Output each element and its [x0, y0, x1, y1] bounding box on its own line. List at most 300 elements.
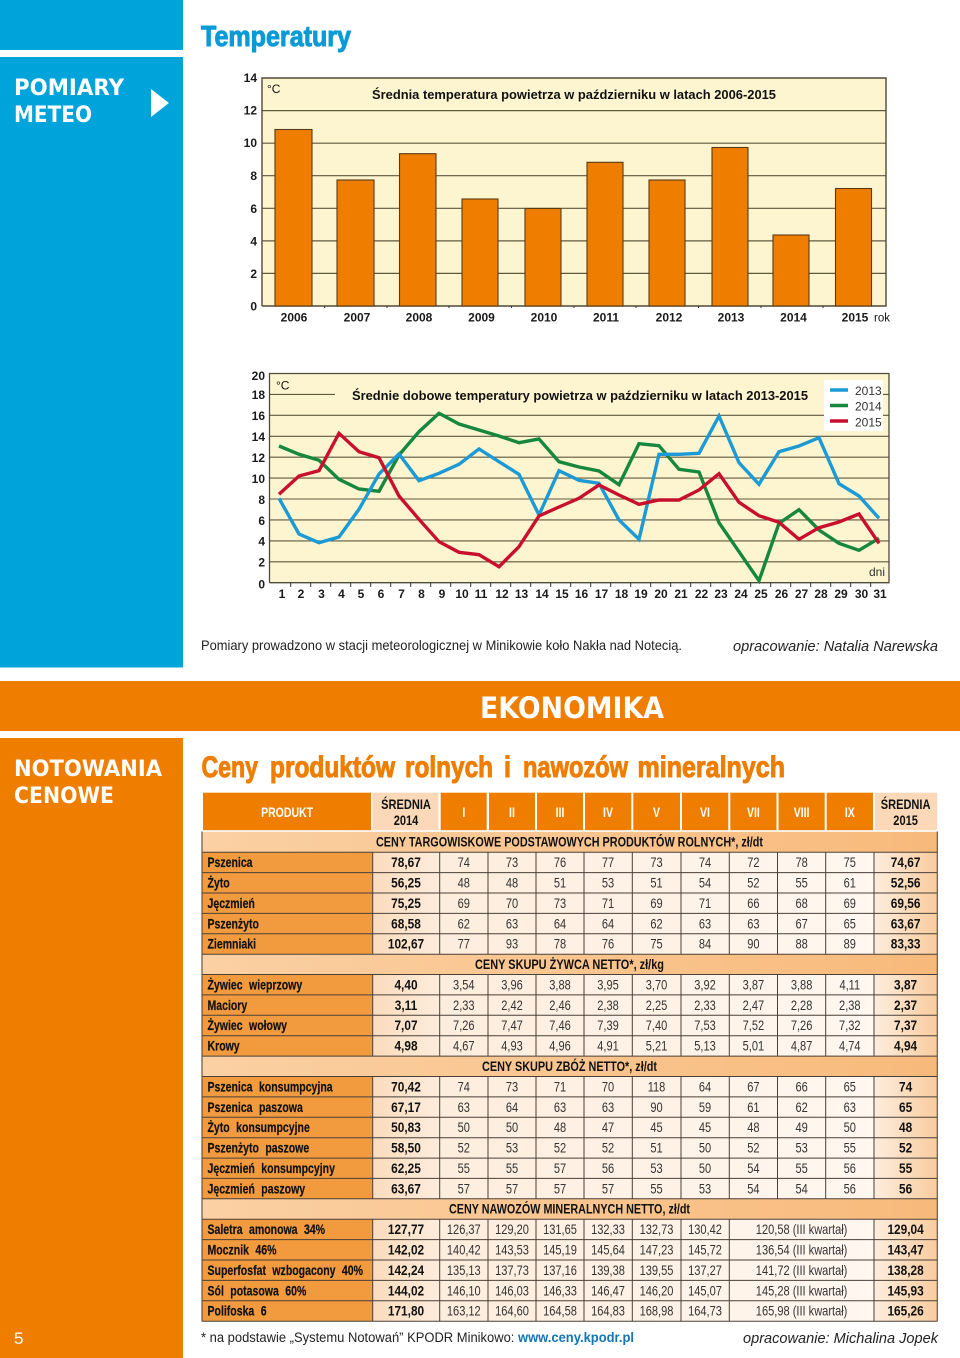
- x axis labels: 2009: [468, 310, 495, 324]
- heading: Ceny produktów: nawozów: [523, 751, 629, 784]
- banner: EKONOMIKA: EKONOMIKA: [480, 691, 665, 725]
- row: Żywiec wieprzowy: 3,87: [894, 977, 917, 993]
- heading: Ceny produktów: i: [504, 751, 511, 784]
- series: 2013 blue line: [279, 416, 879, 543]
- heading: Ceny produktów: rolnych: [405, 751, 493, 784]
- table header row: V: [653, 805, 660, 820]
- row: Żywiec wieprzowy: 3,88: [791, 977, 812, 993]
- table header row: II: [509, 805, 515, 820]
- row: Żywiec wołowy: 7,37: [894, 1017, 917, 1033]
- row: Żywiec wieprzowy: 3,92: [694, 977, 716, 993]
- row: Sól potasowa: [208, 1283, 924, 1299]
- table header row: VII: [747, 805, 760, 820]
- row: Pszenżyto paszowe: 52: [554, 1141, 566, 1156]
- row: Pszenica konsumpcyjna: 71: [554, 1079, 566, 1095]
- row: Polifoska 6: 164,73: [688, 1304, 722, 1319]
- row: Pszenżyto: 62: [650, 916, 663, 932]
- row: Pszenżyto paszowe: 52: [747, 1141, 760, 1156]
- row: Maciory: 2,38: [839, 998, 861, 1013]
- row: Pszenica paszowa: Pszenica paszowa: [208, 1100, 303, 1115]
- y axis labels: 0: [258, 578, 265, 592]
- row: Pszenica konsumpcyjna: 74: [458, 1079, 470, 1095]
- row: Pszenżyto: 63,67: [891, 916, 920, 931]
- table header row: VIII: [794, 805, 809, 820]
- y axis labels: 8: [258, 493, 265, 507]
- row: Żyto konsumpcyjne: 47: [602, 1120, 614, 1135]
- x axis labels: 2010: [531, 310, 558, 324]
- heading: Ceny produktów: Ceny: [202, 751, 258, 784]
- x axis labels: days: 2: [298, 587, 305, 601]
- row: Żywiec wołowy: 7,39: [597, 1018, 619, 1033]
- row: Pszenica paszowa: 63: [554, 1100, 566, 1115]
- table header row: 2014: [394, 813, 418, 828]
- row: Pszenica paszowa: 59: [699, 1100, 711, 1115]
- row: Pszenica konsumpcyjna: 64: [699, 1079, 711, 1095]
- page number: 5: [14, 1329, 23, 1348]
- row: Żywiec wołowy: 7,26: [453, 1018, 475, 1033]
- row: Maciory: 2,28: [791, 998, 812, 1013]
- row: Jęczmień: 69: [458, 896, 470, 911]
- row: Jęczmień: [208, 895, 920, 911]
- row: Sól potasowa: 145,28 (III kwartał): [756, 1283, 847, 1299]
- legend box: [824, 380, 883, 431]
- sidebar title: [14, 757, 162, 809]
- text: author credit Michalina Jopek: opracowanie: Michalina Jopek: [743, 1330, 939, 1347]
- row: Pszenżyto paszowe: Pszenżyto paszowe: [208, 1140, 309, 1156]
- row: Saletra amonowa: 132,33: [591, 1222, 625, 1237]
- x axis labels: days: 6: [378, 587, 385, 601]
- panel: top blue tab: [0, 0, 183, 50]
- x axis labels: 2015: [842, 310, 869, 324]
- table header row: ŚREDNIA: [381, 796, 431, 812]
- line chart: daily average temperature October 2013-2015: [252, 369, 889, 601]
- row: Pszenica: 73: [650, 855, 663, 870]
- row: Żyto konsumpcyjne: 48: [554, 1120, 566, 1135]
- row: Pszenżyto paszowe: 58,50: [391, 1140, 421, 1156]
- row: Jęczmień paszowy: 54: [795, 1181, 808, 1197]
- table: prices of agricultural products: [202, 793, 937, 1322]
- row: Polifoska 6: [208, 1303, 924, 1319]
- row: Maciory: 2,46: [549, 998, 571, 1013]
- row: Sól potasowa: 146,33: [543, 1283, 577, 1299]
- bar chart: average October temperature 2006-2015: [244, 71, 890, 324]
- x axis labels: 2006: [281, 310, 308, 324]
- x axis labels: days: 3: [318, 587, 325, 601]
- row: Żywiec wieprzowy: 4,11: [839, 977, 860, 993]
- row: Pszenica: 73: [506, 855, 518, 870]
- row: Krowy: 5,21: [646, 1039, 667, 1054]
- y axis labels: 20: [252, 369, 265, 383]
- row: Żyto: 53: [602, 875, 614, 891]
- row: Saletra amonowa: 127,77: [388, 1221, 424, 1237]
- row: Żyto konsumpcyjne: 48: [899, 1119, 912, 1135]
- row: Pszenżyto paszowe: 52: [458, 1141, 470, 1156]
- row: Maciory: 2,47: [743, 998, 764, 1013]
- row: Krowy: 4,94: [894, 1038, 917, 1054]
- row: Pszenica konsumpcyjna: Pszenica konsumpcyjna: [208, 1079, 333, 1095]
- table header row: PRODUKT: [261, 805, 314, 820]
- y axis labels: 14: [252, 430, 265, 444]
- sidebar title: NOTOWANIA: [14, 757, 162, 782]
- row: Krowy: 4,67: [453, 1039, 475, 1054]
- row: Polifoska 6: 164,83: [591, 1304, 625, 1319]
- x axis labels: days: 27: [795, 587, 808, 601]
- heading: Ceny produktów: [202, 751, 785, 784]
- row: Żywiec wołowy: 7,46: [549, 1018, 571, 1033]
- row: Pszenica konsumpcyjna: 73: [506, 1079, 518, 1095]
- row: Jęczmień konsumpcyjny: 55: [506, 1161, 518, 1176]
- row: Żyto konsumpcyjne: 48: [747, 1120, 760, 1135]
- row: Pszenica konsumpcyjna: 67: [747, 1079, 760, 1095]
- row: Jęczmień: 73: [554, 896, 566, 911]
- row: Mocznik: 145,64: [591, 1242, 625, 1258]
- row: Sól potasowa: 145,07: [688, 1283, 722, 1299]
- row: Saletra amonowa: 120,58 (III kwartał): [756, 1222, 847, 1237]
- row: Jęczmień konsumpcyjny: 56: [844, 1161, 856, 1176]
- unit labels: °C: [276, 378, 290, 392]
- x axis labels: rok: [874, 312, 890, 324]
- row: Pszenica konsumpcyjna: 118: [648, 1079, 665, 1095]
- row: Żyto: 61: [844, 875, 856, 891]
- legend box: 2013: [855, 384, 882, 398]
- row: Pszenżyto paszowe: [208, 1140, 912, 1156]
- y axis labels: 10: [252, 472, 265, 486]
- row: Żyto konsumpcyjne: 45: [699, 1120, 711, 1135]
- row: Pszenica paszowa: 67,17: [391, 1099, 421, 1115]
- row: Ziemniaki: 89: [844, 937, 856, 952]
- row: Pszenica konsumpcyjna: 70: [602, 1079, 614, 1095]
- row: Jęczmień: Jęczmień: [208, 896, 255, 911]
- row: Żywiec wieprzowy: 3,95: [597, 977, 619, 993]
- banner: EKONOMIKA: [0, 681, 960, 731]
- row: Pszenica paszowa: 62: [795, 1100, 808, 1115]
- row: Saletra amonowa: Saletra amonowa 34%: [208, 1222, 325, 1237]
- row: Mocznik: 136,54 (III kwartał): [756, 1242, 847, 1258]
- row: Saletra amonowa: 130,42: [688, 1222, 722, 1237]
- x axis labels: days: 7: [398, 587, 405, 601]
- row: Żywiec wołowy: 7,32: [839, 1018, 861, 1033]
- section: fertiliser prices: CENY NAWOZÓW MINERALNYCH NETTO, zł/dt: [449, 1202, 690, 1217]
- x axis labels: days: 22: [695, 587, 708, 601]
- row: Polifoska 6: 165,98 (III kwartał): [756, 1304, 847, 1319]
- x axis labels: 2014: [780, 310, 807, 324]
- row: Jęczmień paszowy: Jęczmień paszowy: [208, 1181, 305, 1197]
- row: Pszenica paszowa: [208, 1099, 912, 1115]
- row: Pszenica paszowa: 90: [650, 1100, 663, 1115]
- heading: Ceny produktów: mineralnych: [638, 751, 785, 784]
- row: Mocznik: 143,47: [887, 1242, 924, 1258]
- row: Żywiec wołowy: 7,47: [501, 1018, 523, 1033]
- row: Polifoska 6: 168,98: [640, 1304, 674, 1319]
- panel: NOTOWANIA CENOWE sidebar: [0, 738, 183, 1358]
- y axis labels: [252, 369, 265, 592]
- row: Sól potasowa: 146,10: [447, 1283, 481, 1299]
- row: Żyto: 52: [747, 875, 760, 891]
- row: Mocznik: 142,02: [388, 1242, 424, 1258]
- row: Pszenżyto: 65: [844, 916, 856, 932]
- row: Krowy: 4,96: [549, 1039, 571, 1054]
- row: Jęczmień paszowy: 57: [458, 1181, 470, 1197]
- row: Polifoska 6: 171,80: [388, 1303, 424, 1319]
- text: author credit Natalia Narewska: opracowanie: Natalia Narewska: [733, 638, 938, 655]
- row: Pszenżyto paszowe: 52: [899, 1140, 912, 1156]
- series: 2015 red line: [279, 433, 879, 567]
- row: Mocznik: Mocznik 46%: [208, 1242, 277, 1258]
- row: Jęczmień konsumpcyjny: 54: [747, 1161, 760, 1176]
- row: Sól potasowa: 145,93: [887, 1283, 924, 1298]
- x axis labels: days: 9: [439, 587, 446, 601]
- row: Mocznik: 143,53: [495, 1242, 529, 1258]
- row: Żywiec wieprzowy: 4,40: [394, 977, 418, 993]
- y axis labels: 12: [252, 451, 265, 465]
- row: Sól potasowa: 146,20: [640, 1283, 674, 1299]
- row: Żyto: 54: [699, 875, 711, 891]
- table header row: ŚREDNIA: [881, 796, 931, 812]
- row: Ziemniaki: 83,33: [891, 936, 920, 952]
- row: Pszenica konsumpcyjna: 65: [844, 1079, 856, 1095]
- table header row: III: [556, 805, 564, 820]
- icon: white arrow: [151, 89, 169, 117]
- row: Jęczmień paszowy: 57: [506, 1181, 518, 1197]
- x axis labels: days: 19: [634, 587, 648, 601]
- x axis labels: days: 24: [734, 587, 748, 601]
- row: Pszenżyto: 64: [554, 916, 566, 932]
- row: Ziemniaki: 76: [602, 937, 614, 952]
- series: 2014 green line: [279, 413, 879, 581]
- y axis labels: 6: [258, 514, 265, 528]
- row: Jęczmień: 68: [795, 896, 808, 911]
- sidebar title: POMIARY METEO: [14, 76, 125, 128]
- row: Sól potasowa: 146,47: [591, 1283, 625, 1299]
- x axis labels: 2008: [406, 310, 433, 324]
- y axis labels: 8: [250, 169, 257, 183]
- row: Saletra amonowa: [208, 1221, 924, 1237]
- row: Pszenica: Pszenica: [208, 855, 253, 870]
- row: Jęczmień paszowy: 57: [554, 1181, 566, 1197]
- row: Pszenica paszowa: 63: [458, 1100, 470, 1115]
- row: Pszenica paszowa: 64: [506, 1100, 518, 1115]
- row: Pszenica: 77: [602, 855, 614, 870]
- row: Superfosfat: 142,24: [388, 1262, 424, 1278]
- row: Krowy: 5,01: [743, 1039, 764, 1054]
- row: Żyto: 51: [554, 875, 566, 891]
- row: Jęczmień: 71: [699, 896, 711, 911]
- row: Jęczmień paszowy: 54: [747, 1181, 760, 1197]
- row: Pszenica: 74,67: [891, 854, 920, 870]
- x axis labels: 2012: [656, 310, 683, 324]
- row: Żyto: 55: [795, 875, 808, 891]
- table header row: IX: [845, 805, 855, 820]
- row: Pszenica: 78: [795, 855, 808, 870]
- x axis labels: days: 17: [595, 587, 608, 601]
- row: Żywiec wołowy: 7,40: [646, 1018, 667, 1033]
- row: Żywiec wieprzowy: Żywiec wieprzowy: [208, 976, 302, 993]
- row: Żywiec wieprzowy: 3,70: [646, 977, 667, 993]
- row: Żyto: 51: [650, 875, 663, 891]
- row: Pszenżyto paszowe: 50: [699, 1141, 711, 1156]
- row: Ziemniaki: 102,67: [388, 936, 424, 952]
- row: Sól potasowa: Sól potasowa 60%: [208, 1283, 307, 1299]
- row: Żywiec wołowy: 7,53: [694, 1018, 716, 1033]
- row: Jęczmień: 69: [844, 896, 856, 911]
- row: Pszenica: 74: [699, 855, 711, 870]
- row: Pszenżyto paszowe: 52: [602, 1141, 614, 1156]
- row: Krowy: 4,87: [791, 1039, 812, 1054]
- row: Ziemniaki: 78: [554, 937, 566, 952]
- row: Ziemniaki: [208, 936, 920, 952]
- row: Żyto konsumpcyjne: 50: [844, 1120, 856, 1135]
- row: Maciory: 2,42: [501, 998, 523, 1013]
- x axis labels: days: 12: [495, 587, 509, 601]
- row: Maciory: [208, 997, 917, 1013]
- row: Żyto konsumpcyjne: 49: [795, 1120, 808, 1135]
- x axis labels: days: 23: [714, 587, 728, 601]
- row: Pszenżyto paszowe: 51: [650, 1141, 663, 1156]
- y axis labels: 18: [252, 388, 265, 402]
- row: Superfosfat: 137,73: [495, 1263, 529, 1278]
- row: Mocznik: [208, 1242, 924, 1258]
- legend box: 2015: [855, 416, 882, 430]
- y axis labels: 0: [250, 300, 257, 314]
- row: Pszenica paszowa: 65: [899, 1099, 912, 1115]
- row: Żywiec wieprzowy: 3,88: [549, 977, 571, 993]
- row: Jęczmień konsumpcyjny: 55: [795, 1161, 808, 1176]
- y axis labels: [244, 71, 257, 314]
- sidebar title: CENOWE: [14, 784, 114, 809]
- table header row: IV: [603, 805, 613, 820]
- row: Pszenżyto: 62: [458, 916, 470, 932]
- panel: POMIARY METEO sidebar: [0, 57, 183, 668]
- row: Polifoska 6: 163,12: [447, 1304, 481, 1319]
- table header row: I: [462, 805, 465, 820]
- row: Pszenica: [208, 854, 920, 870]
- row: Pszenżyto paszowe: 55: [844, 1141, 856, 1156]
- row: Żywiec wołowy: [208, 1017, 917, 1034]
- x axis labels: days: 31: [873, 587, 887, 601]
- x axis labels: 2013: [718, 310, 745, 324]
- row: Pszenżyto paszowe: 53: [506, 1141, 518, 1156]
- chart title: Średnie dobowe temperatury powietrza w październiku w latach 2013-2015: [352, 388, 808, 403]
- row: Maciory: 2,37: [894, 997, 917, 1013]
- x axis labels: days: 5: [358, 587, 365, 601]
- text: footnote with source: * na podstawie „Systemu Notowań” KPODR Minikowo: www.ceny.kpodr.pl: [201, 1330, 634, 1345]
- row: Ziemniaki: 77: [458, 937, 470, 952]
- row: Żyto: [208, 874, 920, 891]
- row: Superfosfat: Superfosfat wzbogacony 40%: [208, 1263, 363, 1278]
- row: Superfosfat: 139,38: [591, 1263, 625, 1278]
- row: Pszenżyto: 64: [602, 916, 614, 932]
- row: Żyto konsumpcyjne: 50: [506, 1120, 518, 1135]
- row: Krowy: 4,91: [597, 1039, 619, 1054]
- y axis labels: 4: [258, 534, 265, 548]
- row: Mocznik: 145,72: [688, 1242, 722, 1258]
- y axis labels: 2: [258, 556, 265, 570]
- heading: Ceny produktów: produktów: [270, 751, 396, 784]
- x axis labels: 2007: [344, 310, 371, 324]
- row: Jęczmień konsumpcyjny: 50: [699, 1161, 711, 1176]
- row: Jęczmień paszowy: [208, 1181, 912, 1197]
- row: Ziemniaki: 84: [699, 937, 711, 952]
- row: Krowy: 4,93: [501, 1039, 523, 1054]
- row: Jęczmień paszowy: 53: [699, 1181, 711, 1197]
- row: Pszenica konsumpcyjna: 66: [795, 1079, 808, 1095]
- row: Pszenżyto: 63: [747, 916, 760, 932]
- x axis labels: days: 25: [754, 587, 768, 601]
- x axis labels: days: 15: [555, 587, 569, 601]
- x axis labels: days: 29: [834, 587, 848, 601]
- row: Jęczmień konsumpcyjny: 57: [554, 1161, 566, 1176]
- table header row: [203, 793, 937, 830]
- row: Żywiec wołowy: 7,26: [791, 1018, 812, 1033]
- row: Pszenica konsumpcyjna: [208, 1079, 912, 1095]
- row: Ziemniaki: 93: [506, 937, 518, 952]
- row: Pszenica: 75: [844, 855, 856, 870]
- row: Maciory: Maciory: [208, 998, 247, 1013]
- x axis labels: days: 8: [418, 587, 425, 601]
- row: Żyto konsumpcyjne: Żyto konsumpcyjne: [208, 1119, 310, 1136]
- row: Superfosfat: [208, 1262, 924, 1278]
- sidebar title: POMIARY METEO: POMIARY: [14, 76, 125, 101]
- row: Pszenica paszowa: 63: [844, 1100, 856, 1115]
- row: Jęczmień konsumpcyjny: 62,25: [391, 1160, 421, 1176]
- row: Jęczmień konsumpcyjny: 56: [602, 1161, 614, 1176]
- row: Superfosfat: 135,13: [447, 1263, 481, 1278]
- x axis labels: days: 13: [515, 587, 528, 601]
- row: Jęczmień: 70: [506, 896, 518, 911]
- section: livestock purchase prices: CENY SKUPU ŻYWCA NETTO*, zł/kg: [475, 957, 664, 972]
- row: Żyto: 48: [506, 875, 518, 891]
- row: Pszenżyto: Pszenżyto: [208, 916, 259, 932]
- row: Ziemniaki: Ziemniaki: [208, 936, 256, 952]
- x axis labels: 2011: [593, 310, 619, 324]
- row: Krowy: 4,98: [394, 1038, 418, 1054]
- row: Krowy: 4,74: [839, 1039, 861, 1054]
- row: Jęczmień konsumpcyjny: [208, 1160, 912, 1176]
- row: Pszenica: 76: [554, 855, 566, 870]
- row: Pszenica konsumpcyjna: 74: [899, 1079, 912, 1095]
- row: Polifoska 6: 164,58: [543, 1304, 577, 1319]
- row: Pszenżyto: [208, 916, 920, 932]
- row: Żywiec wołowy: 7,52: [743, 1018, 764, 1033]
- row: Jęczmień paszowy: 57: [602, 1181, 614, 1197]
- heading: Temperatury: Temperatury: [201, 21, 351, 53]
- x axis labels: days: 28: [814, 587, 828, 601]
- row: Maciory: 2,33: [453, 998, 475, 1013]
- row: Krowy: Krowy: [208, 1038, 240, 1054]
- row: Żyto konsumpcyjne: 50: [458, 1120, 470, 1135]
- row: Saletra amonowa: 132,73: [640, 1222, 674, 1237]
- y axis labels: 10: [244, 136, 257, 150]
- row: Żyto: 56,25: [391, 875, 421, 891]
- row: Żyto konsumpcyjne: [208, 1119, 912, 1136]
- x axis labels: days: 18: [615, 587, 628, 601]
- row: Krowy: 5,13: [694, 1039, 716, 1054]
- row: Pszenżyto: 63: [699, 916, 711, 932]
- table header row: 2015: [893, 813, 918, 828]
- sidebar title: POMIARY METEO: METEO: [14, 103, 92, 128]
- row: Saletra amonowa: 129,04: [887, 1221, 924, 1237]
- row: Mocznik: 147,23: [640, 1242, 674, 1258]
- row: Jęczmień paszowy: 55: [650, 1181, 663, 1197]
- row: Żyto: Żyto: [208, 874, 230, 891]
- row: Sól potasowa: 146,03: [495, 1283, 529, 1299]
- row: Pszenżyto: 68,58: [391, 916, 421, 931]
- row: Ziemniaki: 90: [747, 937, 760, 952]
- row: Pszenica: 78,67: [391, 854, 421, 870]
- row: Jęczmień paszowy: 56: [844, 1181, 856, 1197]
- row: Polifoska 6: Polifoska 6: [208, 1303, 267, 1319]
- row: Jęczmień konsumpcyjny: 55: [458, 1161, 470, 1176]
